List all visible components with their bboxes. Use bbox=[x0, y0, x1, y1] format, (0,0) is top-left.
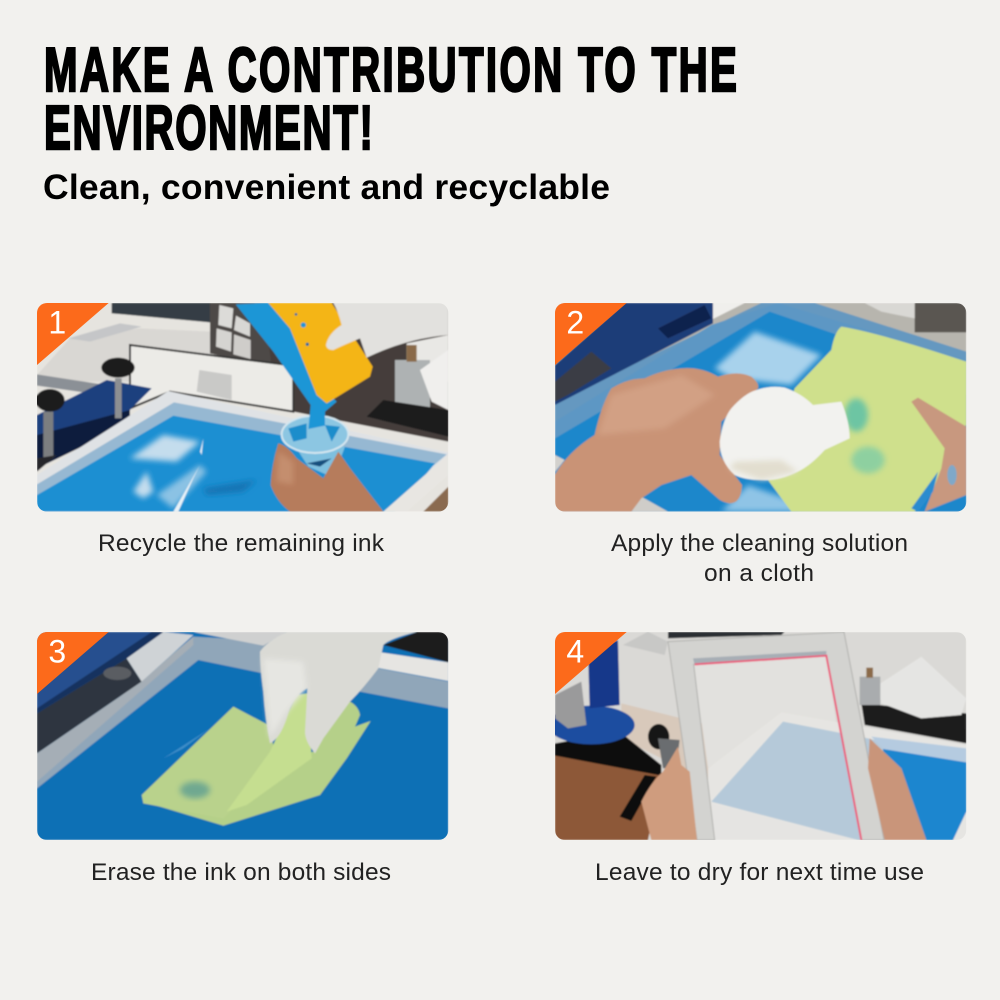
panel: step 4 photo bbox=[548, 632, 966, 840]
panel: step 2 photo bbox=[555, 303, 966, 512]
caption: step 1: Recycle the remaining ink bbox=[98, 530, 385, 557]
subtitle: Clean, convenient and recyclable bbox=[43, 167, 610, 207]
step badge: 4 bbox=[555, 632, 627, 694]
caption: step 4: Leave to dry for next time use bbox=[595, 859, 924, 886]
title: MAKE A CONTRIBUTION TO THE bbox=[44, 36, 737, 105]
step badge: 4: 4 bbox=[566, 633, 584, 669]
title: ENVIRONMENT! bbox=[44, 94, 373, 163]
caption: step 2 bbox=[611, 530, 908, 587]
step badge: 2: 2 bbox=[566, 304, 584, 340]
panel: step 3 photo bbox=[37, 632, 448, 840]
caption: step 3: Erase the ink on both sides bbox=[91, 859, 391, 886]
step badge: 3 bbox=[37, 632, 109, 694]
step badge: 2 bbox=[555, 303, 627, 365]
caption: step 2: Apply the cleaning solution bbox=[611, 530, 908, 557]
title bbox=[44, 36, 737, 163]
step badge: 1: 1 bbox=[48, 304, 66, 340]
panel: step 1 photo bbox=[35, 303, 448, 512]
caption: step 2: on a cloth bbox=[704, 560, 814, 587]
step badge: 3: 3 bbox=[48, 633, 66, 669]
step badge: 1 bbox=[37, 303, 109, 365]
